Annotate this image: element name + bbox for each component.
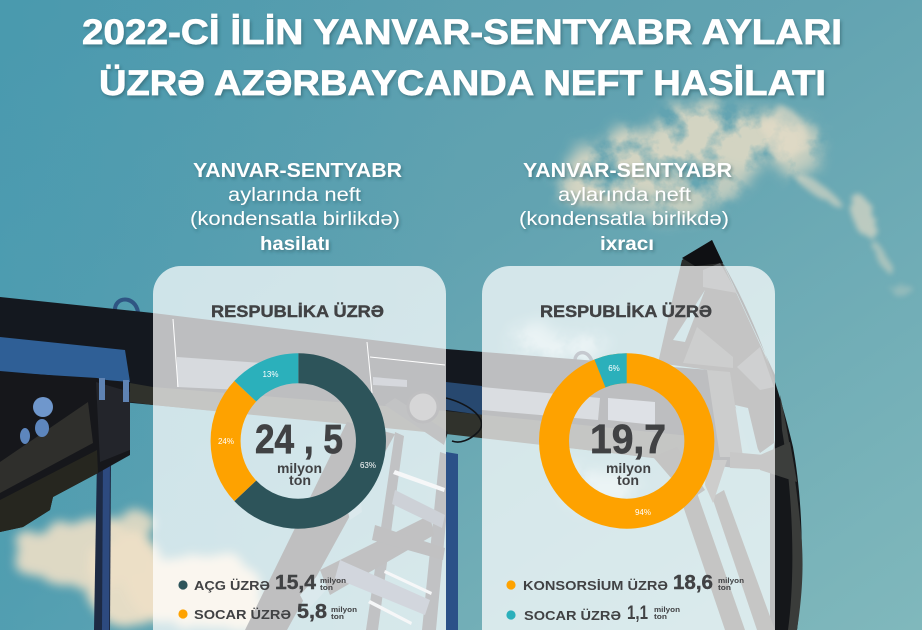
beam detail lines xyxy=(173,319,445,393)
legend: SOCAR export: 1,1 xyxy=(627,603,648,624)
tower ladder xyxy=(366,432,404,630)
donut chart: production xyxy=(218,368,376,514)
legend: SOCAR export: ton xyxy=(654,614,667,621)
blue fasteners xyxy=(33,397,53,417)
donut chart: export: ton xyxy=(617,473,639,488)
panel: export card xyxy=(482,266,775,630)
legend: consortium: ton xyxy=(718,585,731,592)
horsehead gusset xyxy=(760,442,797,482)
illustration: pump jack xyxy=(0,240,803,630)
tower thick leg xyxy=(245,422,395,630)
horsehead upper frame xyxy=(658,240,775,453)
legend: SOCAR production: 5,8 xyxy=(297,601,327,623)
title xyxy=(82,13,842,103)
legend: ACG: 15,4 xyxy=(275,572,317,594)
heading: export: aylarında neft xyxy=(558,185,692,206)
beam web blue xyxy=(0,337,130,382)
title: 2022-Cİ İLİN YANVAR-SENTYABR AYLARI xyxy=(82,13,842,52)
donut chart: production: milyon xyxy=(277,461,322,476)
legend: SOCAR export: milyon xyxy=(654,607,680,614)
clouds: lower left xyxy=(10,514,280,630)
heading: production: hasilatı xyxy=(260,234,330,255)
panel: production card xyxy=(153,266,446,630)
blue tower column xyxy=(446,452,458,630)
legend: ACG xyxy=(178,572,346,594)
legend: SOCAR export xyxy=(506,603,680,624)
saddle bearing xyxy=(385,398,448,445)
clouds: upper right xyxy=(557,103,826,224)
legend: consortium: KONSORSİUM ÜZRƏ xyxy=(523,578,668,593)
donut chart: export: 94% xyxy=(635,508,651,517)
heading: production: (kondensatla birlikdə) xyxy=(190,209,400,230)
donut chart: export xyxy=(554,364,699,517)
legend: consortium: milyon xyxy=(718,578,744,585)
legend: consortium xyxy=(506,572,744,594)
panel heading: export: RESPUBLİKA ÜZRƏ xyxy=(540,302,712,321)
donut chart: production: 24% xyxy=(218,437,234,446)
donut chart: export: milyon xyxy=(606,461,651,476)
legend: SOCAR production: milyon xyxy=(331,607,357,614)
legend: SOCAR production xyxy=(178,601,357,623)
heading: production: YANVAR-SENTYABR xyxy=(193,160,403,182)
cloud wisp: far right xyxy=(765,109,913,296)
cable xyxy=(446,398,482,442)
lifting ring xyxy=(115,300,138,312)
donut chart: export: 6% xyxy=(608,364,620,373)
legend: SOCAR production: SOCAR ÜZRƏ xyxy=(194,607,291,622)
title: ÜZRƏ AZƏRBAYCANDA NEFT HASİLATI xyxy=(99,64,826,103)
donut chart: production: 63% xyxy=(360,461,376,470)
panel heading: production: RESPUBLİKA ÜZRƏ xyxy=(211,302,384,321)
donut chart: production: ton xyxy=(289,473,311,488)
heading: export xyxy=(519,160,733,255)
donut chart: export: 19,7 xyxy=(590,416,666,462)
heading: export: (kondensatla birlikdə) xyxy=(519,209,729,230)
horsehead rim xyxy=(723,263,802,630)
legend: consortium: 18,6 xyxy=(673,572,713,594)
front bearing housing xyxy=(0,372,130,532)
legend: ACG: milyon xyxy=(320,578,346,585)
heading: production xyxy=(190,160,403,255)
heading: export: YANVAR-SENTYABR xyxy=(523,160,733,182)
legend: ACG: AÇG ÜZRƏ xyxy=(194,578,270,593)
rear post xyxy=(94,458,111,630)
legend: ACG: ton xyxy=(320,585,333,592)
legend: SOCAR export: SOCAR ÜZRƏ xyxy=(524,608,621,623)
walking beam xyxy=(0,297,735,468)
horsehead legs xyxy=(680,490,745,630)
donut chart: production: 13% xyxy=(262,370,279,379)
heading: export: ixracı xyxy=(600,234,654,255)
beam lower flange xyxy=(130,383,690,462)
heading: production: aylarında neft xyxy=(228,185,362,206)
donut chart: production: 24 , 5 xyxy=(255,416,343,462)
legend: SOCAR production: ton xyxy=(331,614,344,621)
clouds: behind right panel xyxy=(510,325,640,508)
